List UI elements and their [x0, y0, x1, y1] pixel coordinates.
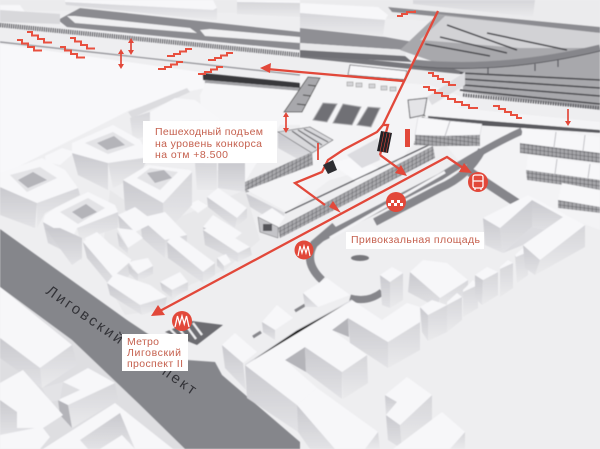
arrow head metro	[151, 305, 165, 316]
long route to metro	[158, 157, 466, 312]
terraced buildings	[415, 117, 600, 213]
ground between central blocks	[100, 190, 260, 315]
upper right building	[300, 0, 600, 62]
escalator	[377, 131, 392, 153]
top strip: buildings and road	[0, 0, 600, 72]
east row of blocks	[380, 248, 528, 341]
courtyard block 2	[45, 125, 150, 190]
angled wall strip	[128, 88, 190, 118]
courtyard block 4	[43, 192, 118, 260]
station square marker	[351, 255, 369, 261]
arrow head west	[260, 63, 271, 73]
metro crossing	[165, 321, 223, 345]
metro icon square	[294, 240, 314, 260]
small huts	[347, 82, 396, 91]
arrow head taxi	[395, 165, 407, 176]
metro icon Ligovsky	[172, 311, 192, 331]
small south blocks	[385, 377, 465, 449]
station forecourt	[300, 75, 470, 180]
long glazed facade	[278, 146, 435, 238]
taxi and bus roads	[253, 131, 522, 337]
red routes	[17, 10, 571, 316]
upper left white plane	[0, 44, 206, 176]
courtyard block 1	[0, 158, 80, 228]
station hall	[278, 77, 333, 167]
callout: metro: Метро	[127, 336, 159, 348]
right ground	[430, 125, 600, 230]
callout: metro	[122, 334, 188, 371]
callout: station square	[346, 232, 484, 249]
callout: pedestrian rise: на уровень конкорса	[155, 138, 262, 150]
callout: station square: Привокзальная площадь	[351, 234, 481, 246]
central lower blocks	[45, 225, 252, 315]
rail line and dark band	[0, 42, 300, 91]
street label: Лиговский проспект	[43, 282, 200, 399]
rail tracks	[400, 14, 600, 110]
callout: pedestrian rise: на отм +8.500	[155, 149, 228, 161]
route to west arrow	[267, 69, 403, 81]
tall blocks under callout	[188, 163, 247, 252]
vertical double arrows	[118, 38, 571, 133]
stairs	[17, 10, 522, 118]
callout: metro: проспект II	[127, 358, 183, 370]
main route	[380, 11, 438, 155]
platform	[348, 65, 600, 145]
callout: pedestrian rise	[143, 121, 277, 163]
south-west blocks	[0, 287, 173, 449]
Ligovsky prospekt road	[0, 229, 300, 449]
road divider strip	[330, 172, 445, 238]
glazed hall	[243, 138, 433, 225]
rooftop blocks north	[130, 98, 222, 140]
callout: metro: Лиговский	[127, 347, 181, 359]
arrow head south	[329, 201, 341, 213]
south block gable	[222, 278, 350, 390]
taxi icon	[386, 192, 406, 212]
callout: pedestrian rise: Пешеходный подъем	[155, 126, 263, 138]
arrow head bus	[459, 163, 472, 173]
branch to taxi	[380, 155, 402, 171]
roof skylights	[313, 103, 380, 127]
white court behind station	[200, 83, 310, 182]
ground south of road	[0, 287, 185, 449]
courtyard block 3	[123, 165, 192, 236]
bus icon	[468, 172, 488, 192]
central blocks	[85, 207, 187, 260]
south main block	[245, 300, 420, 449]
east courtyard block	[483, 195, 585, 275]
small station building	[258, 208, 285, 238]
